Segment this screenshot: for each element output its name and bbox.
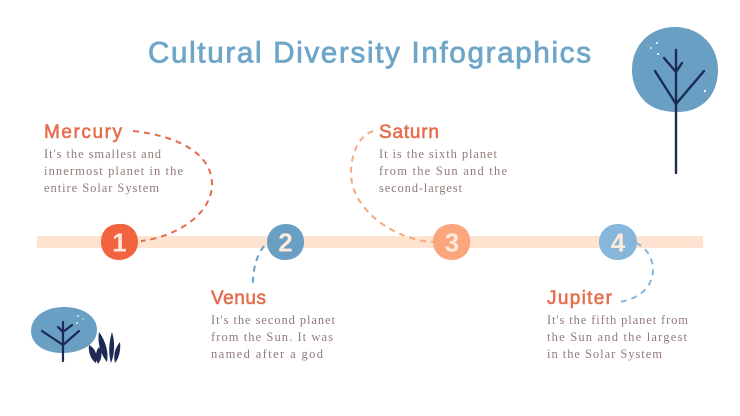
icon: small tree with grass <box>31 307 120 364</box>
marker 4 <box>599 224 637 260</box>
text block: Mercury: innermost planet in the <box>44 164 183 178</box>
text block: Mercury: entire Solar System <box>44 181 159 195</box>
text block: Venus: It's the second planet <box>211 313 336 327</box>
marker 1: 1 <box>112 228 127 258</box>
icon: large tree <box>632 27 718 173</box>
connector: Jupiter <box>617 243 653 302</box>
text block: Venus: from the Sun. It was <box>211 330 333 344</box>
text block: Venus: Venus <box>211 288 266 309</box>
marker 1 <box>101 224 138 260</box>
timeline bar <box>37 236 703 248</box>
text block: Mercury <box>44 122 183 195</box>
title: Cultural Diversity Infographics <box>148 36 591 70</box>
connector: Venus <box>253 246 264 283</box>
text block: Jupiter <box>547 288 688 361</box>
marker 4: 4 <box>611 228 626 258</box>
text block: Venus: named after a god <box>211 347 324 361</box>
text block: Mercury: It's the smallest and <box>44 147 162 161</box>
text block: Jupiter: in the Solar System <box>547 347 662 361</box>
marker 2 <box>267 224 304 260</box>
marker 2: 2 <box>278 228 293 258</box>
text block: Venus <box>211 288 336 361</box>
marker 3: 3 <box>445 228 459 258</box>
connector: Mercury <box>133 131 212 241</box>
text block: Saturn <box>379 122 507 195</box>
text block: Jupiter: It's the fifth planet from <box>547 313 688 327</box>
text block: Mercury: Mercury <box>44 122 122 143</box>
text block: Saturn: from the Sun and the <box>379 164 507 178</box>
text block: Saturn: Saturn <box>379 122 439 143</box>
connector: Saturn <box>351 131 433 242</box>
text block: Jupiter: Jupiter <box>547 288 613 309</box>
marker 3 <box>433 224 470 260</box>
text block: Saturn: It is the sixth planet <box>379 147 498 161</box>
text block: Jupiter: the Sun and the largest <box>547 330 688 344</box>
text block: Saturn: second-largest <box>379 181 463 195</box>
